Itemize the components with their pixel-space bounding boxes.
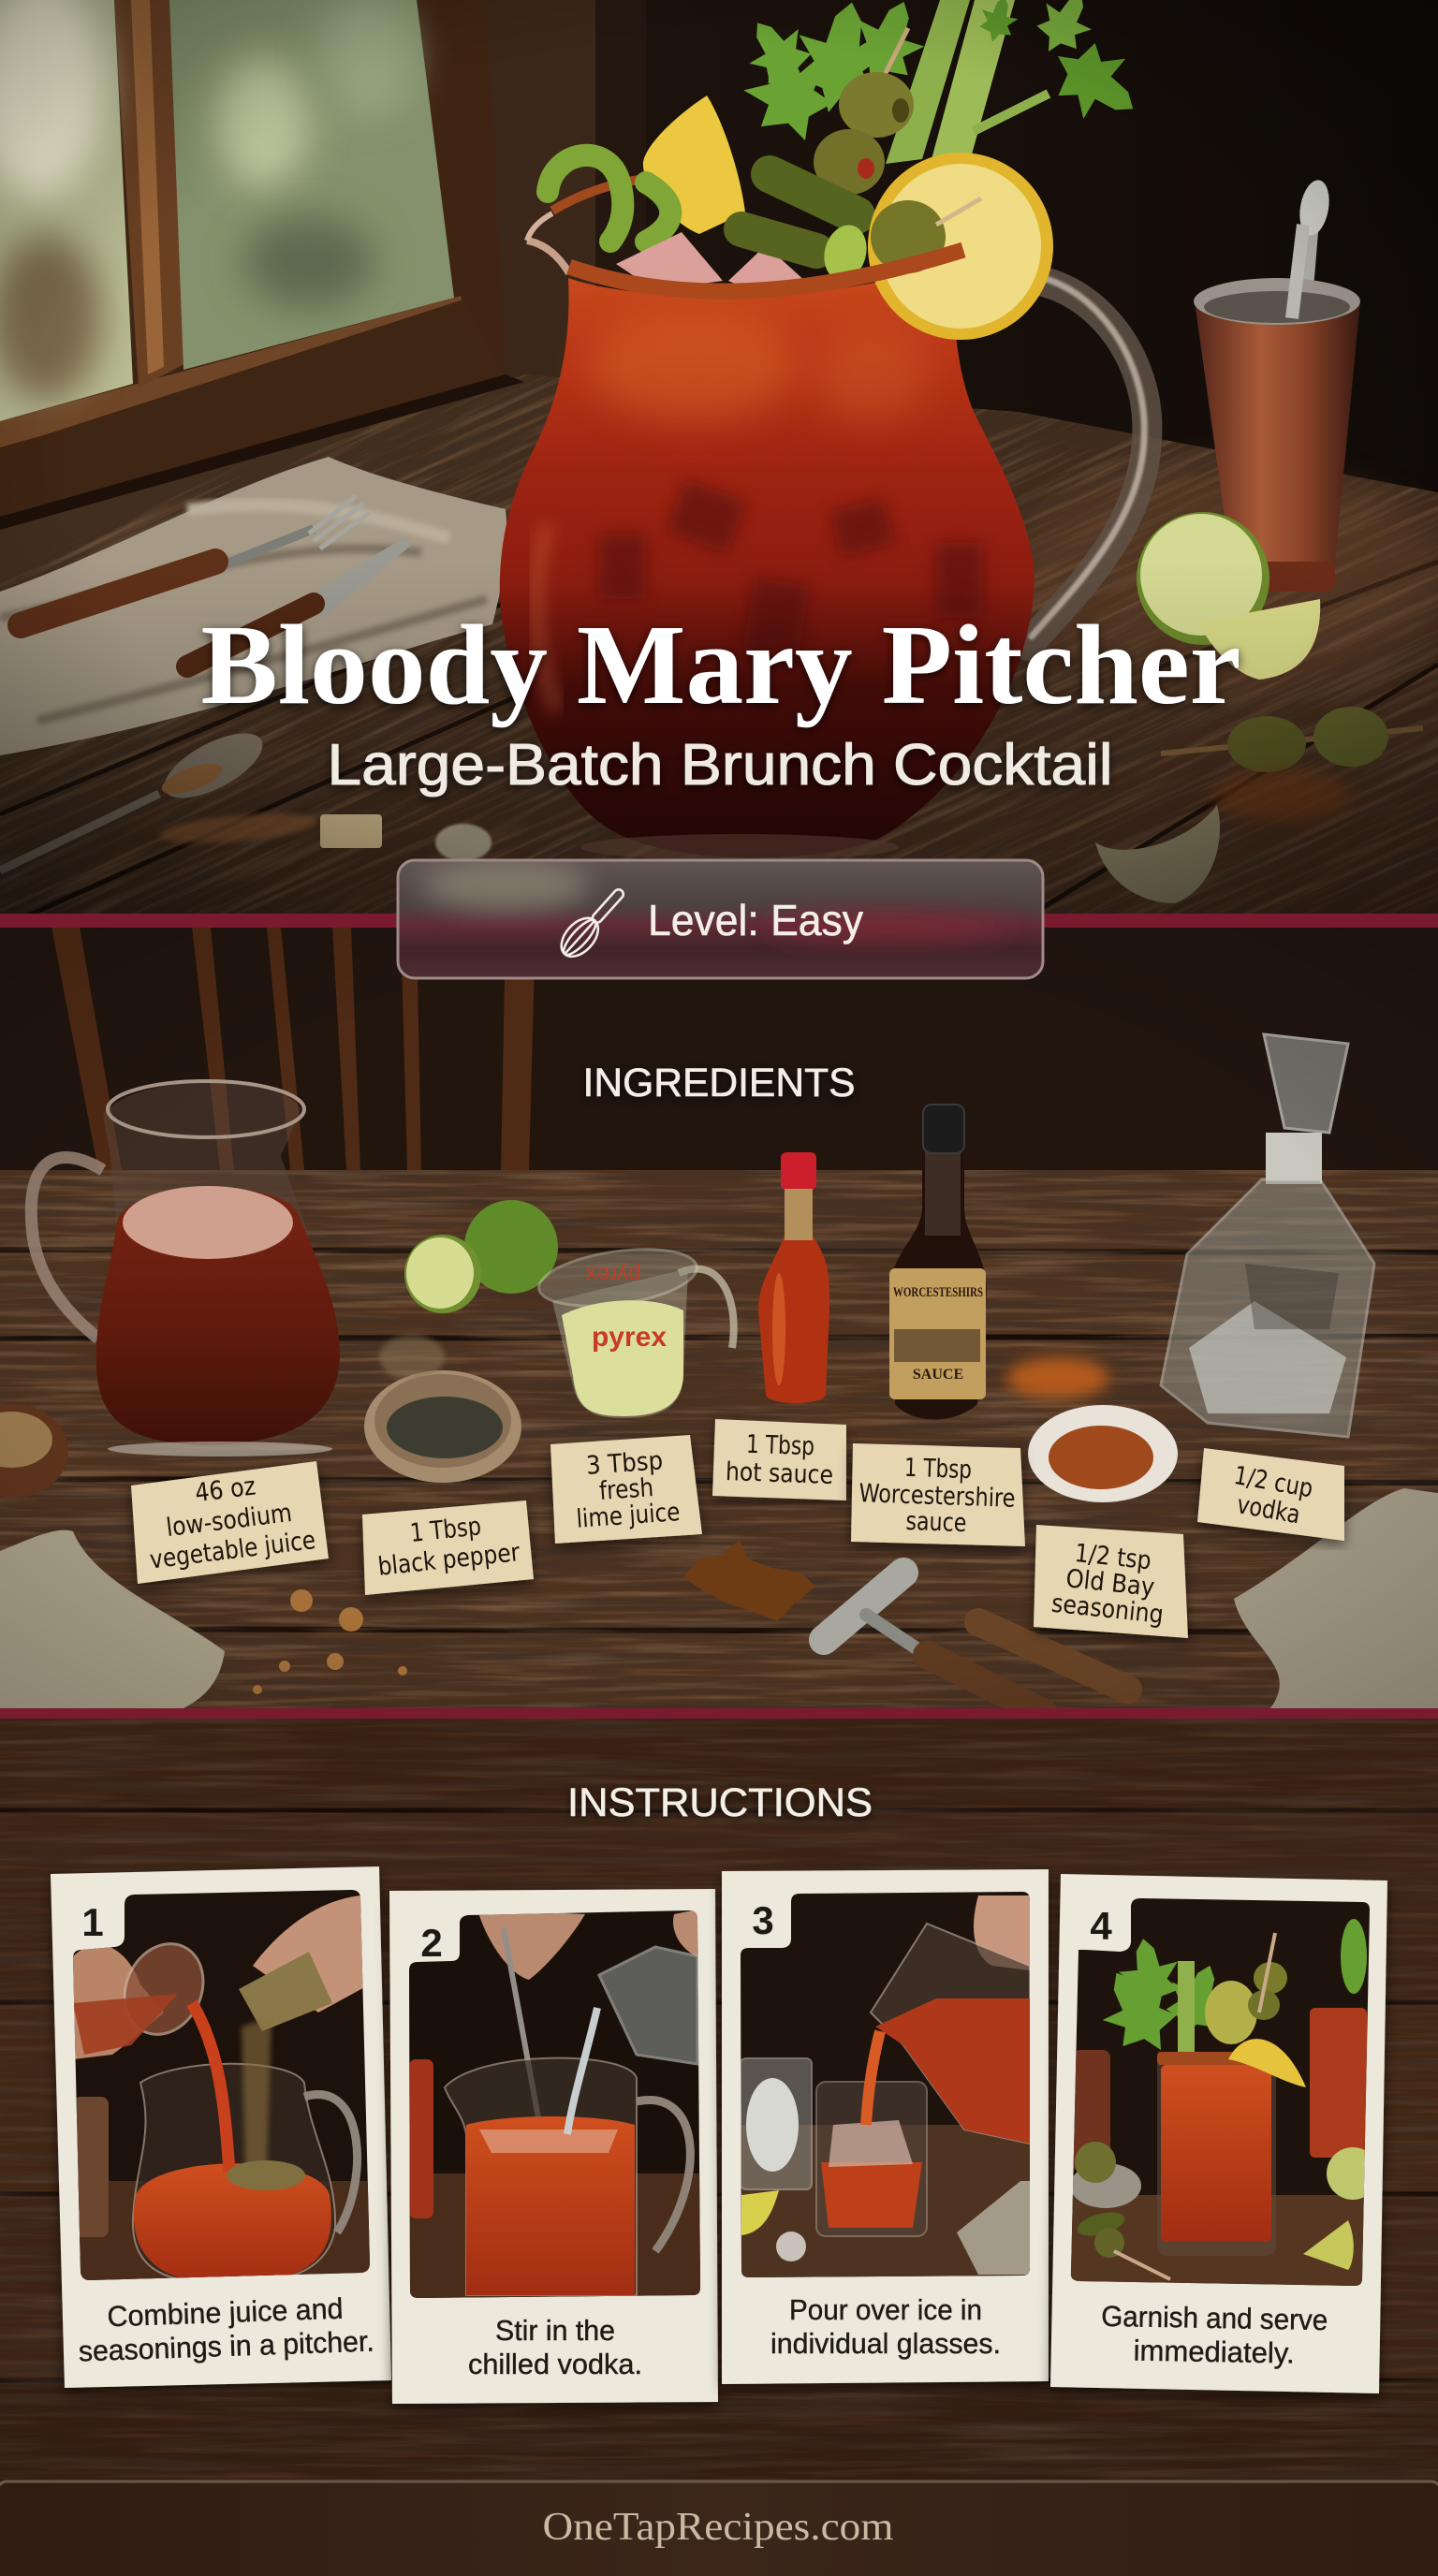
lemon wedge: [643, 95, 745, 234]
title: Bloody Mary Pitcher: [200, 602, 1241, 728]
small wooden bowl: [0, 1404, 68, 1498]
left hand and tipped glass: [73, 1945, 164, 2059]
step card 3: [722, 1869, 1049, 2384]
step caption: [77, 2291, 374, 2367]
footer bar: [0, 2481, 1438, 2576]
olives on pick: [1095, 707, 1423, 903]
ingredient card: hot sauce: hot sauce: [725, 1457, 833, 1490]
ingredient card: lime juice: 3 Tbsp: [585, 1446, 664, 1481]
ingredient card: juice: low-sodium: [165, 1499, 294, 1543]
fork and knife: [21, 496, 412, 666]
ingredient card: lime juice: [550, 1435, 702, 1544]
lime wedge: [1303, 2220, 1354, 2270]
water stream: [567, 2008, 597, 2134]
step caption: seasonings in a pitcher.: [78, 2324, 374, 2367]
pour stream: [866, 2031, 880, 2125]
ice glass: [741, 2058, 812, 2189]
measuring cup: [536, 1240, 734, 1418]
lemon and olives: [1205, 1933, 1306, 2087]
ingredient card: pepper: black pepper: [376, 1538, 521, 1582]
ingredient card: old bay: Old Bay: [1064, 1564, 1156, 1603]
window sill: [44, 300, 466, 435]
step caption: Pour over ice in: [789, 2293, 982, 2326]
step caption: Stir in the: [495, 2314, 615, 2347]
ingredient card: lime juice: lime juice: [576, 1498, 681, 1534]
panel: instructions background: [0, 1719, 1438, 2482]
hot sauce bottle: [409, 2059, 433, 2218]
spill: [683, 1540, 815, 1621]
level badge: [398, 858, 1043, 978]
spice jar: [239, 1952, 332, 2031]
tall glass drink: [1157, 2052, 1276, 2256]
gherkin and olive pick: [1075, 2208, 1170, 2279]
lemon slice: [818, 153, 1053, 340]
step caption: [1100, 2300, 1328, 2370]
back bottle: [1073, 2050, 1110, 2172]
subtitle: Large-Batch Brunch Cocktail: [328, 733, 1112, 798]
ingredient card: vodka: [1197, 1448, 1344, 1541]
step caption: [468, 2314, 642, 2380]
divider band: hero: [0, 914, 1438, 928]
olives on the garnish pick: [814, 28, 914, 195]
ingredient card: vodka: vodka: [1235, 1490, 1302, 1530]
ingredient card: worcestershire: sauce: [905, 1507, 967, 1538]
linen napkin: [0, 457, 506, 755]
step number: 2: [420, 1921, 443, 1965]
lime half: [1327, 2147, 1379, 2200]
panel: ingredients scene: [0, 927, 1438, 1713]
celery leaves: [731, 0, 1154, 154]
step number: 4: [1090, 1904, 1112, 1948]
photo: step 3: [735, 1886, 1034, 2279]
ingredient card: old bay: seasoning: [1050, 1589, 1165, 1630]
step caption: Combine juice and: [107, 2292, 344, 2333]
back glass: [1310, 2008, 1367, 2158]
ingredient card: worcestershire: 1 Tbsp: [903, 1454, 972, 1485]
ingredient card: hot sauce: [712, 1419, 846, 1500]
right linen napkin: [1234, 1488, 1438, 1708]
ingredient card: juice: [131, 1461, 329, 1584]
step caption: immediately.: [1133, 2334, 1295, 2369]
step card 4: [1050, 1874, 1387, 2393]
step number: 1: [81, 1900, 104, 1944]
heading: instructions: INSTRUCTIONS: [567, 1780, 873, 1825]
salted rim back: [552, 178, 655, 211]
ingredient card: pepper: 1 Tbsp: [409, 1512, 482, 1548]
step number: 3: [752, 1898, 774, 1942]
worcestershire bottle: [889, 1105, 987, 1419]
side jar: [73, 2097, 109, 2237]
ingredient card: worcestershire: Worcestershire: [858, 1479, 1016, 1514]
celery leaves: [1086, 1919, 1367, 2068]
measuring cup: pyrex: [586, 1262, 640, 1287]
hand: [974, 1895, 1030, 1970]
hand: [477, 1910, 585, 1980]
step card 2: [389, 1889, 718, 2404]
filled glass: [816, 2082, 927, 2236]
spice stream: [242, 2017, 271, 2172]
orange spice pile: [1006, 1357, 1109, 1398]
crumbs: [253, 1589, 407, 1694]
salted rim: [527, 213, 963, 291]
limes: [404, 1200, 558, 1313]
worcestershire bottle: SAUCE: [913, 1367, 963, 1383]
photo: step 4: [1067, 1895, 1379, 2289]
window panes: [0, 0, 454, 421]
ice cubes: [616, 232, 807, 292]
vodka decanter: [1161, 1034, 1374, 1437]
glass pitcher: [133, 2064, 335, 2284]
icon: whisk: [554, 882, 632, 963]
step caption: Garnish and serve: [1101, 2300, 1328, 2336]
ingredient card: juice: 46 oz: [194, 1471, 257, 1508]
badge label: Level: Easy: [648, 896, 863, 944]
black pepper bowl: [364, 1335, 521, 1483]
ingredient card: hot sauce: 1 Tbsp: [746, 1430, 815, 1461]
celery stalks: [886, 0, 1049, 164]
ingredient card: lime juice: fresh: [598, 1473, 654, 1506]
footer site name: OneTapRecipes.com: [543, 2506, 894, 2549]
photo: step 2: [403, 1905, 707, 2303]
ingredient card: pepper: [362, 1500, 534, 1595]
scattered spice and spoon: [0, 721, 492, 871]
ingredient card: old bay: 1/2 tsp: [1073, 1539, 1152, 1575]
measuring cup: pyrex: [592, 1322, 667, 1353]
bar spoon: [504, 1928, 543, 2144]
juice stream: [192, 2003, 229, 2172]
limes: [1137, 512, 1320, 680]
window and wooden frame: [0, 0, 595, 449]
right hand: [253, 1895, 370, 2012]
step caption: individual glasses.: [770, 2327, 1001, 2360]
gherkins: [741, 174, 857, 251]
pitcher handle: [992, 275, 1147, 646]
tilted pitcher: [871, 1924, 1030, 2144]
lime wedge: [741, 2190, 779, 2235]
photo: step 1: [66, 1886, 374, 2284]
panel: hero scene: [0, 0, 1438, 914]
ingredient card: old bay: [1034, 1525, 1188, 1638]
ingredient card: worcestershire: [851, 1443, 1025, 1546]
wooden table: [0, 374, 1438, 914]
heading: ingredients: INGREDIENTS: [582, 1061, 856, 1105]
step card 1: [51, 1866, 391, 2388]
hot sauce bottle: [758, 1152, 829, 1403]
white spice bowl: [1028, 1405, 1178, 1502]
divider band: ingredients: [0, 1708, 1438, 1719]
ingredient card: juice: vegetable juice: [148, 1526, 317, 1575]
lime curl: [548, 155, 670, 242]
muddler and knife tools: [824, 1573, 1128, 1713]
worcestershire bottle: WORCESTESHIRS: [893, 1285, 983, 1300]
linen: [957, 2181, 1030, 2275]
step caption: [770, 2293, 1001, 2360]
left linen napkin: [0, 1530, 225, 1708]
step caption: chilled vodka.: [468, 2348, 642, 2380]
olive bowl: [1070, 2142, 1141, 2208]
glass pitcher: [445, 2058, 637, 2295]
vodka decanter: [599, 1947, 697, 2064]
juice pitcher: [31, 1081, 340, 1456]
ingredient card: vodka: 1/2 cup: [1232, 1461, 1315, 1503]
pitcher: [500, 255, 1034, 860]
copper cup and spoon: [1194, 178, 1360, 592]
